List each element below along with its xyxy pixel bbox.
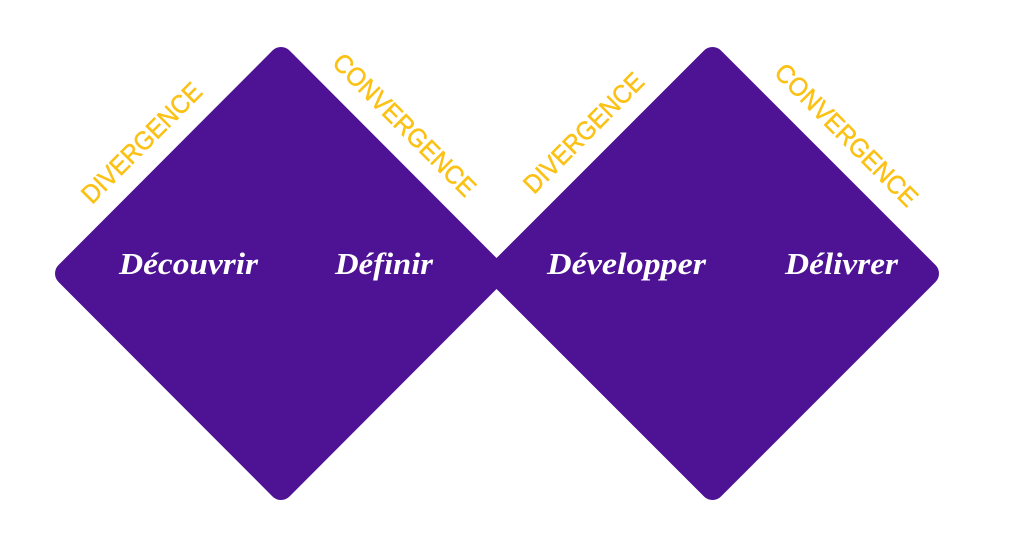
- label: divergence left: DIVERGENCE: [75, 76, 208, 209]
- panel: right diamond: [498, 59, 927, 488]
- label: convergence left: CONVERGENCE: [327, 47, 482, 203]
- heading: Découvrir: Découvrir: [118, 246, 259, 281]
- panel: left diamond: [67, 59, 495, 488]
- label: divergence right: DIVERGENCE: [517, 66, 650, 199]
- heading: Délivrer: Délivrer: [784, 246, 899, 281]
- heading: Développer: Développer: [546, 246, 707, 281]
- label: convergence right: CONVERGENCE: [769, 57, 924, 213]
- heading: Définir: Définir: [334, 246, 434, 281]
